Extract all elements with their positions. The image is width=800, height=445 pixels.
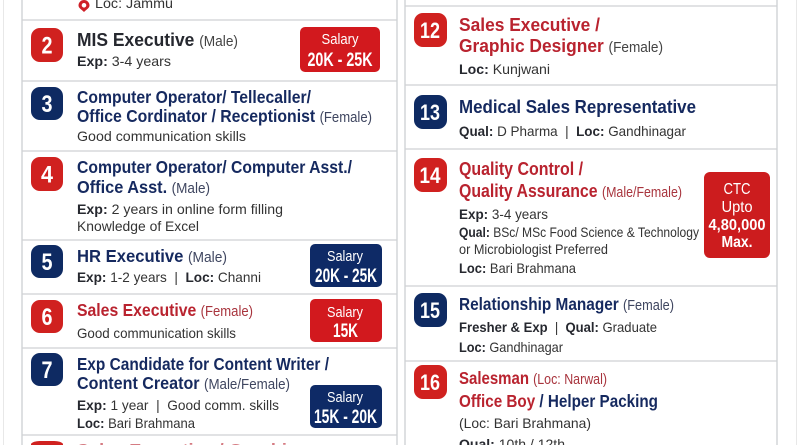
job title — [77, 87, 372, 126]
CTC box: 4,80,000 — [708, 217, 766, 234]
job 13: Medical Sales Representative — [414, 95, 696, 139]
panel: right job list — [405, 0, 777, 445]
salary box: 15K - 20K — [314, 407, 377, 428]
job details: Good communication skills — [77, 325, 236, 341]
number badge 5: 5 — [42, 249, 52, 276]
job 15: Relationship Manager — [414, 293, 674, 355]
job title: Sales Executive / — [459, 14, 600, 35]
job details: Exp: 3-4 years — [459, 206, 548, 222]
number badge 7 — [31, 353, 63, 386]
job title — [459, 368, 658, 411]
job details: (Loc: Bari Brahmana) — [459, 415, 591, 431]
number badge 15: 15 — [420, 298, 440, 323]
job 6: Sales Executive — [31, 299, 382, 342]
panel: left job list — [22, 0, 397, 445]
job 5: HR Executive — [31, 244, 382, 287]
job title: Office Asst. (Male) — [77, 177, 210, 197]
salary box — [310, 385, 382, 428]
job title — [77, 157, 352, 197]
CTC box: Upto — [722, 199, 752, 216]
number badge 2: 2 — [42, 32, 52, 60]
job details — [459, 206, 699, 276]
number badge 16 — [414, 365, 447, 399]
salary box — [310, 244, 382, 287]
job title: Graphic Designer (Female) — [459, 35, 663, 56]
salary box: Salary — [327, 248, 363, 265]
number badge 15 — [414, 293, 447, 327]
job details: Loc: Gandhinagar — [459, 339, 563, 355]
job 1 location — [78, 0, 173, 12]
number badge 5 — [31, 245, 63, 278]
job details: Exp: 1-2 years | Loc: Channi — [77, 269, 261, 285]
salary box: 15K — [333, 321, 358, 342]
number badge 14 — [414, 158, 447, 192]
job 14: Quality Control / Quality Assurance — [414, 158, 770, 276]
job title: Exp Candidate for Content Writer / — [77, 354, 329, 374]
salary box — [310, 299, 382, 342]
salary box: Salary — [322, 31, 359, 48]
job title — [459, 14, 663, 56]
job title: Quality Control / — [459, 158, 583, 179]
job 8: clipped row — [31, 440, 297, 445]
number badge 13: 13 — [420, 100, 440, 125]
number badge 12: 12 — [420, 18, 440, 43]
salary box: 20K - 25K — [308, 50, 373, 71]
job title: Relationship Manager (Female) — [459, 294, 674, 314]
job 4: Computer Operator / Office Asst. — [31, 157, 352, 234]
job 7: Content Writer — [31, 353, 382, 431]
number badge 6: 6 — [42, 304, 52, 331]
number badge 3 — [31, 87, 63, 120]
CTC box — [704, 172, 770, 258]
job details: Exp: 1 year | Good comm. skills — [77, 397, 279, 413]
CTC box: CTC — [724, 181, 750, 198]
number badge 2 — [31, 28, 63, 62]
CTC box: Max. — [722, 234, 752, 251]
job details — [77, 201, 283, 234]
job title — [77, 354, 329, 393]
number badge 3: 3 — [42, 91, 52, 118]
job details — [459, 319, 657, 355]
job details: Fresher & Exp | Qual: Graduate — [459, 319, 657, 335]
job title: Computer Operator/ Tellecaller/ — [77, 87, 311, 107]
job details: Exp: 3-4 years — [77, 53, 171, 69]
job title: Quality Assurance (Male/Female) — [459, 180, 682, 201]
salary box: Salary — [327, 389, 363, 406]
job 12: Sales Executive / Graphic Designer — [414, 13, 663, 77]
job title: Office Cordinator / Receptionist (Female) — [77, 106, 372, 126]
number badge 4: 4 — [41, 162, 54, 188]
job details: or Microbiologist Preferred — [459, 241, 608, 257]
job details: Loc: Bari Brahmana — [459, 260, 576, 276]
job details: Exp: 2 years in online form filling — [77, 201, 283, 217]
icon: location pin — [78, 0, 90, 12]
job details: Good communication skills — [77, 128, 246, 144]
job details: Knowledge of Excel — [77, 218, 199, 234]
job details: Loc: Bari Brahmana — [77, 415, 195, 431]
salary box: Salary — [327, 304, 363, 321]
salary box — [300, 27, 380, 72]
number badge 13 — [414, 95, 447, 129]
number badge 6 — [31, 300, 63, 333]
job title: Salesman (Loc: Narwal) — [459, 368, 607, 388]
job title: Sales Executive (Female) — [77, 300, 253, 320]
job details — [77, 397, 279, 431]
number badge 4 — [31, 157, 63, 191]
job details: Loc: Kunjwani — [459, 61, 550, 77]
job details: Qual: D Pharma | Loc: Gandhinagar — [459, 123, 686, 139]
salary box: 20K - 25K — [315, 266, 377, 287]
job title: Content Creator (Male/Female) — [77, 373, 290, 393]
number badge 12 — [414, 13, 447, 47]
job 16: Salesman / Office Boy — [414, 365, 658, 445]
number badge 8 — [31, 441, 63, 445]
job title: HR Executive (Male) — [77, 246, 227, 266]
job details: Qual: BSc/ MSc Food Science & Technology — [459, 224, 699, 240]
job 2: MIS Executive — [31, 27, 380, 72]
job title: MIS Executive (Male) — [77, 29, 238, 50]
number badge 7: 7 — [42, 357, 52, 384]
job title: Office Boy / Helper Packing — [459, 391, 658, 411]
job 3: Computer Operator / Receptionist — [31, 87, 372, 144]
job title — [459, 158, 682, 201]
number badge 16: 16 — [420, 370, 440, 395]
job title: Medical Sales Representative — [459, 96, 696, 117]
job details — [459, 415, 591, 445]
job title: Computer Operator/ Computer Asst./ — [77, 157, 352, 177]
number badge 14: 14 — [420, 163, 441, 188]
